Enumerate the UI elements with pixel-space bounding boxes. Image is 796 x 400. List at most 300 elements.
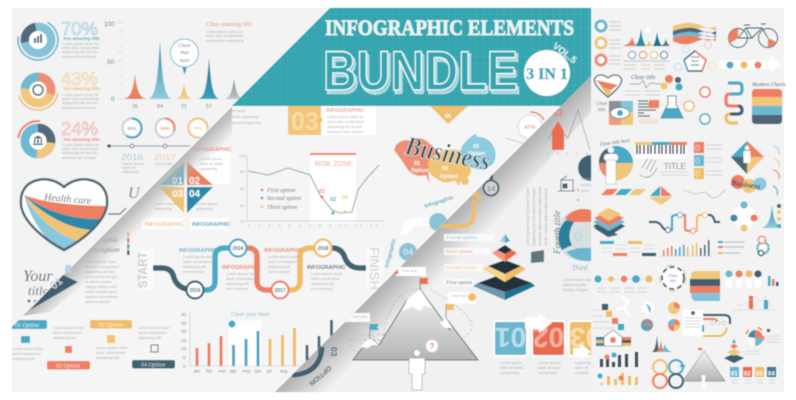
chart: risk zone line chart: Second option xyxy=(267,196,301,202)
chart: monthly bar chart: 25 xyxy=(181,321,187,326)
chart: monthly bar chart: jul xyxy=(266,368,272,374)
text block: clear title pulse xyxy=(625,75,668,95)
text block: 43 percent: eiusmod sed tempor xyxy=(62,106,97,110)
chart: person pie: Clear title here xyxy=(600,139,631,148)
panel: numbered blocks 01 02 03: Lorem ipsum xyxy=(538,361,560,365)
chart: wavy year timeline: adipiscing elit xyxy=(268,265,292,269)
chart: wavy year timeline: INFOGRAPHIC xyxy=(179,248,218,254)
chart: wavy year timeline: sed eiusmod xyxy=(311,287,333,291)
text block: 24 percent: adipiscing elit sed do xyxy=(62,151,97,155)
panel: numbered blocks 01 02 03: consectetur xyxy=(500,371,520,375)
row: mini numbered blocks: 04 xyxy=(768,372,775,378)
labels: diamond captions: adipiscing xyxy=(196,207,213,211)
chart: fourth and third title wheel xyxy=(553,209,608,292)
text block: graphic description: do eiusmod tempor xyxy=(85,275,118,279)
chart: wavy year timeline: 2016 xyxy=(232,246,244,252)
panel: four option tags: 04 Option xyxy=(141,362,165,368)
panel: four option tags: 02 Option xyxy=(56,364,80,370)
chart: wavy year timeline: 2018 xyxy=(317,246,329,252)
chart: wavy year timeline: Lorem ipsum dolor xyxy=(311,272,343,276)
text block: 70 percent: You amazing title xyxy=(63,36,100,41)
chart: mini numbered tags xyxy=(694,142,722,179)
panel: infographic 03 card: 03 xyxy=(291,108,319,136)
labels: diamond captions: INFOGRAPHIC xyxy=(192,222,231,228)
panel: infographic box 02: dolor sit amet xyxy=(200,162,224,166)
chart: wavy year timeline: adipiscing elit xyxy=(311,282,335,286)
illustration: mountain with flags and person xyxy=(344,278,478,390)
chart: layered pyramid: Third option xyxy=(445,249,473,255)
chart: four-loop flower xyxy=(653,360,683,388)
icon: white arrow with dots xyxy=(720,55,781,72)
chart: risk zone line chart: 80 xyxy=(240,169,245,174)
chart: horizontal timeline: Lorem ipsum xyxy=(122,162,144,166)
icon: numbered pin 14 xyxy=(466,172,498,200)
panel: four option tags: amet consectetur xyxy=(53,331,83,335)
chart: wavy year timeline: sed eiusmod xyxy=(183,270,205,274)
label: mountain tags: Your text xyxy=(402,269,418,273)
panel: four option tags: 01 Option xyxy=(15,323,39,329)
text block: 24 percent: You amazing title xyxy=(63,137,100,142)
text block: graphic description: sit amet consectetur xyxy=(85,265,120,269)
shadow: first fold xyxy=(22,106,232,316)
icon: partial circle right: ipsum xyxy=(581,183,591,187)
chart: mini spikes xyxy=(652,335,672,352)
chart: photo grid with ellipse: title xyxy=(598,108,607,113)
text block: clear amazing title: consectetur adipiscing xyxy=(206,39,244,43)
labels: diamond captions: adipiscing xyxy=(155,207,172,211)
label: vol 5: VOL.5 xyxy=(550,41,579,67)
chart: tall spike xyxy=(761,204,783,228)
row: mini list xyxy=(718,241,745,254)
panel: infographic 03 card: Lorem ipsum dolor sit xyxy=(327,115,364,119)
chart: small diamond xyxy=(650,186,672,205)
chart: mini wave timeline xyxy=(649,212,720,234)
text block: vertical lorem with bank icon xyxy=(526,186,548,263)
labels: diamond captions: INFOGRAPHIC xyxy=(145,222,184,228)
callout: clear that here bubble xyxy=(170,39,198,75)
chart: wavy year timeline: amet consectetur xyxy=(268,260,298,264)
icon: pentagon: TEXT xyxy=(691,59,699,63)
text block: graphic description: ut labore dolore xyxy=(85,280,111,284)
text block: 70 percent xyxy=(61,19,100,59)
chart: horizontal timeline: 2016 xyxy=(121,153,144,162)
chart: four-part diamond 01 02 03 04: 02 xyxy=(189,176,201,187)
chart: spheres xyxy=(641,302,680,331)
text block: white note xyxy=(683,310,703,336)
chart: 24 percent donut xyxy=(16,120,56,159)
panel: infographic 03 card xyxy=(288,105,376,136)
icon: partial circle right xyxy=(576,154,592,202)
chart: layered pyramid: Fourth option xyxy=(445,235,477,241)
text block: graphic description: minim veniam quis xyxy=(85,290,117,294)
panel: four option tags: Lorem ipsum dolor xyxy=(53,326,85,330)
chart: horizontal timeline xyxy=(107,144,190,174)
chart: mini numbered tags: 0 xyxy=(695,143,700,153)
text block: 43 percent: 43% xyxy=(61,69,98,89)
chart: four pills xyxy=(726,270,778,288)
text block: upper lorem: sit amet amet ing xyxy=(232,121,261,125)
chart: risk zone line chart: 100 xyxy=(239,153,246,158)
text block: upper lorem: dolor adipiscing xyxy=(232,115,258,119)
chart: monthly bar chart: Clear your here xyxy=(231,312,269,318)
text block: 43 percent: amet sine consectetur xyxy=(62,97,100,101)
illustration: business ink splash: Option xyxy=(468,151,486,157)
text block: cropped U: U xyxy=(128,185,141,202)
chart: yellow bars xyxy=(598,373,638,385)
chart: monthly bar chart: feb xyxy=(206,368,213,374)
chart: monthly bar chart xyxy=(181,312,340,374)
chart: spike area chart: 0 xyxy=(111,96,115,103)
text block: graphic description: description xyxy=(86,245,120,254)
illustration: mini business splash xyxy=(730,175,766,193)
label: mountain tags: Your text xyxy=(352,315,368,319)
chart: risk zone line chart: 60 xyxy=(240,186,245,191)
text block: clear amazing title xyxy=(206,22,253,43)
chart: monthly bar chart: apr xyxy=(230,368,237,374)
panel: infographic box 02: Lorem ipsum xyxy=(200,157,222,161)
icon: gears xyxy=(758,236,768,256)
chart: monthly bar chart: 0 xyxy=(183,364,186,369)
text block: graphic description: adipiscing elit sed xyxy=(85,270,115,274)
chart: horizontal bars xyxy=(638,100,659,124)
chart: photo grid with ellipse: Clear xyxy=(596,102,607,107)
chart: four-part diamond 01 02 03 04 xyxy=(159,162,213,213)
icon: partial circle right: dolor xyxy=(581,189,590,193)
chart: monthly bar chart: jun xyxy=(254,368,262,374)
panel: numbered blocks 01 02 03: consect xyxy=(575,371,589,375)
icon: pentagon: YOUR xyxy=(691,55,700,59)
chart: fourth and third title wheel: tempor magna xyxy=(563,288,588,292)
illustration: mini mountain xyxy=(680,348,725,389)
panel: four option tags: Lorem ipsum dolor xyxy=(96,346,128,350)
panel: four option tags: amet consectetur xyxy=(96,351,126,355)
icon: mini heart xyxy=(595,75,621,97)
chart: monthly bar chart: 10 xyxy=(181,346,187,351)
row: mini numbered blocks: 02 xyxy=(744,372,751,378)
panel: infographic box 02: adipiscing xyxy=(200,167,217,171)
panel: four option tags: adipiscing elit xyxy=(96,356,120,360)
text block: vertical lorem with bank icon: Lorem ipsum dolor sit amet consec xyxy=(526,187,530,246)
text block: clear amazing title: Clear amazing title xyxy=(206,22,253,28)
panel: four option tags: 03 Option xyxy=(99,322,123,328)
panel: banner xyxy=(232,8,591,106)
panel: infographic box 02 xyxy=(192,146,232,184)
chart: wavy year timeline: Lorem ipsum dolor xyxy=(183,255,215,259)
icon: 03 option arc: OPTION xyxy=(308,364,332,387)
text block: 70 percent: Lorem ipsum dolor sit xyxy=(62,42,99,46)
chart: fourth and third title wheel: adipiscing elit xyxy=(563,283,587,287)
chart: wavy year timeline: INFOGRAPHIC xyxy=(264,248,303,254)
chart: fourth and third title wheel: Third xyxy=(572,264,588,272)
icon: yellow diamond tip xyxy=(430,106,468,124)
chart: hex ring xyxy=(660,265,686,291)
chart: modern chartes stack: Modern Charts xyxy=(751,82,786,88)
text block: 24 percent: amet sine consectetur xyxy=(62,147,100,151)
text block: graphic description: magna aliqua enim xyxy=(85,285,117,289)
chart: mini wheel with title xyxy=(745,327,780,354)
chart: monthly bar chart: 15 xyxy=(181,338,187,343)
icon: dark ribbon 01: 01 xyxy=(48,275,65,292)
illustration: business ink splash: Option xyxy=(440,174,458,180)
icon: pentagon: HERE xyxy=(691,63,699,67)
chart: wavy year timeline: INFOGRAPHIC xyxy=(222,265,261,271)
text block: 43 percent: adipiscing elit sed do xyxy=(62,101,97,105)
text block: graphic description xyxy=(85,232,130,304)
badge: 3 in 1 xyxy=(524,50,570,96)
chart: wavy year timeline: Lorem ipsum dolor xyxy=(226,272,258,276)
chart: spike area chart: 50 xyxy=(107,59,115,66)
panel: four option tags: amet consectetur xyxy=(138,331,168,335)
chart: red arrow line chart xyxy=(528,109,591,156)
chart: wavy year timeline xyxy=(135,240,383,298)
illustration: mini wave banner xyxy=(673,23,716,44)
chart: wavy year timeline: adipiscing elit xyxy=(183,265,207,269)
chart: red arrow line chart: 1 2 3 4 5 6 7 8 xyxy=(518,151,589,156)
icon: yellow pipe curve xyxy=(436,200,474,226)
chart: monthly bar chart: 5 xyxy=(183,355,186,360)
chart: iso layer stack xyxy=(593,208,625,237)
icon: curved connector with 04 and 05 xyxy=(384,195,454,269)
chart: wavy year timeline: INFOGRAPHIC xyxy=(307,265,346,271)
text block: 24 percent: 24% xyxy=(61,119,98,139)
text block: graphic description: graphic xyxy=(95,235,119,244)
chart: horizontal timeline: 2017 xyxy=(154,153,177,162)
chart: person diamond xyxy=(731,141,764,174)
panel: four option tags: Lorem ipsum dolor xyxy=(12,347,44,351)
chart: 47 percent ring: 47% xyxy=(524,125,536,131)
chart: four-part diamond 01 02 03 04: 01 xyxy=(172,176,184,187)
text block: upper lorem: sit amet, xyxy=(232,109,246,113)
chart: monthly bar chart: mar xyxy=(218,368,226,374)
chart: fourth and third title wheel: Lorem ipsum dolor xyxy=(563,278,595,282)
chart: wavy year timeline: 2015 xyxy=(189,288,201,294)
panel: infographic 03 card: INFOGRAPHIC xyxy=(326,108,365,114)
chart: mini donuts xyxy=(596,21,621,65)
row: mini numbered blocks: 01 xyxy=(731,372,738,378)
panel: numbered blocks 01 02 03: 03 xyxy=(570,322,601,353)
chart: horizontal timeline: dolor sit xyxy=(122,166,136,170)
text block: upper lorem xyxy=(232,109,261,125)
illustration: climber stairs xyxy=(593,298,630,330)
chart: percent rings: 50% xyxy=(160,126,170,131)
text block: mini title: TITLE xyxy=(664,162,686,171)
illustration: business ink splash: Business xyxy=(402,130,493,176)
chart: 43 percent donut xyxy=(18,72,59,112)
text block: 70 percent: adipiscing elit sed do xyxy=(62,50,97,54)
chart: spike area chart: 84 xyxy=(157,104,163,110)
text block: vertical lorem with bank icon: minim veniam quis nostrud exercit xyxy=(544,188,548,246)
icon: house banner xyxy=(596,330,631,346)
icon: curved connector with 04 and 05: Infographic xyxy=(424,195,454,210)
chart: layered pyramid: First option xyxy=(445,280,472,286)
chart: dark bars xyxy=(600,352,638,367)
chart: percent rings: 70% xyxy=(193,126,203,131)
chart: monthly bar chart: aug xyxy=(280,368,288,374)
text block: mini title xyxy=(660,162,688,175)
icon: 03 option arc xyxy=(292,347,339,387)
panel: preview collage xyxy=(593,21,786,389)
text block: your title xyxy=(23,268,53,302)
text block: clear amazing title: Lorem ipsum dolor sit xyxy=(206,30,243,34)
text block: your title: title xyxy=(28,283,48,298)
panel: four option tags: amet consectetur xyxy=(12,352,42,356)
label: mountain tags: Your text xyxy=(452,294,468,298)
panel: infographic box 02: INFOGRAPHIC xyxy=(193,147,232,153)
chart: spike area chart: 100 xyxy=(104,21,115,28)
chart: mini numbered tags: 0 xyxy=(695,156,700,166)
chart: wavy year timeline: adipiscing elit xyxy=(226,282,250,286)
text block: graphic description: ullamco laboris xyxy=(85,300,110,304)
chart: monthly bar chart: 20 xyxy=(181,329,187,334)
heading: bundle shadow: BUNDLE xyxy=(325,42,520,105)
chart: percent rings: 60% xyxy=(127,126,137,131)
chart: dot timeline xyxy=(594,275,652,292)
chart: fourth and third title wheel: 0 xyxy=(574,228,582,245)
chart: four-part diamond 01 02 03 04: 04 xyxy=(189,189,201,200)
chart: person pie xyxy=(599,139,633,184)
chart: wavy year timeline: FINISH xyxy=(367,247,382,290)
chart: photo grid with ellipse xyxy=(596,101,633,125)
panel: right sheet xyxy=(270,70,608,395)
chart: risk zone line chart: 20 xyxy=(240,219,245,224)
text block: 43 percent: Lorem ipsum dolor sit xyxy=(62,93,99,97)
chart: risk zone line chart xyxy=(239,153,384,228)
panel: four option tags: Lorem ipsum dolor xyxy=(138,326,170,330)
chart: spike area chart xyxy=(104,21,244,110)
illustration: business ink splash: 01 xyxy=(414,161,420,167)
chart: risk zone line chart: Third option xyxy=(267,205,297,211)
label: mountain tags xyxy=(345,267,476,322)
icon: numbered pin 14: 14 xyxy=(487,184,496,193)
chart: spike area chart: 21 xyxy=(181,104,187,110)
panel: infographic 03 card: adipiscing elit sit sed xyxy=(327,125,362,129)
chart: risk zone line chart: 40 xyxy=(240,203,245,208)
panel: four option tags xyxy=(8,320,175,370)
text block: clear amazing title: amet sine consectetur xyxy=(206,34,244,38)
chart: four circle ring xyxy=(730,202,758,232)
panel: numbered blocks 01 02 03: Lorem ipsum xyxy=(500,361,522,365)
chart: layered pyramid xyxy=(444,234,535,300)
badge: 3 in 1: 3 IN 1 xyxy=(526,66,568,83)
chart: monthly bar chart: may xyxy=(242,368,251,374)
icon: pentagon xyxy=(674,42,716,71)
text block: 24 percent: Lorem ipsum dolor sit xyxy=(62,143,99,147)
icon: 03 option arc: 03 xyxy=(329,347,339,357)
chart: piano keys xyxy=(635,142,687,177)
chart: wavy year timeline: amet consectetur xyxy=(311,277,341,281)
row: mini numbered blocks: 03 xyxy=(756,372,763,378)
panel: four option tags: adipiscing elit xyxy=(12,357,36,361)
row: mini numbered blocks xyxy=(730,367,776,383)
fold edge: first xyxy=(12,106,232,326)
chart: three rings xyxy=(682,84,710,125)
text block: vertical lorem with bank icon: ut labore dolore magna aliqua enim xyxy=(538,186,542,246)
chart: percent rings xyxy=(122,118,208,138)
text block: 70 percent: eiusmod sed tempor xyxy=(62,55,97,59)
chart: risk zone line chart: 1 2 3 4 5 6 7 8 9 10 11 12 xyxy=(248,223,379,228)
illustration: business ink splash: Option xyxy=(411,168,429,174)
chart: spike area chart: 35 xyxy=(132,104,138,110)
text block: 43 percent: You amazing title xyxy=(63,86,100,91)
text block: graphic description: Lorem ipsum dolor xyxy=(85,260,117,264)
text block: clear title pulse: Clear title xyxy=(631,75,656,81)
chart: mini pyramid xyxy=(724,339,744,363)
chart: mini bars xyxy=(660,240,712,256)
panel: middle sheet xyxy=(11,105,560,376)
chart: wavy year timeline: Lorem ipsum dolor xyxy=(268,255,300,259)
chart: 47 percent ring xyxy=(505,112,545,144)
row: parallelograms xyxy=(601,189,646,195)
heading: bundle: BUNDLE xyxy=(323,39,518,102)
ribbon stack behind banner: Bus xyxy=(295,20,310,31)
chart: fourth and third title wheel: Fourth title xyxy=(553,210,563,255)
chart: hex ring: title xyxy=(670,278,676,283)
illustration: business ink splash: 03 xyxy=(473,144,479,150)
text block: your title: Your xyxy=(23,268,53,285)
panel: infographic 03 card: eiusmod dolor tempor xyxy=(327,130,364,134)
icon: yellow diamond tip: 05 xyxy=(445,114,451,120)
illustration: mini business splash: Business xyxy=(730,178,761,191)
chart: risk zone line chart: 01 xyxy=(319,189,325,195)
chart: horizontal timeline: Lorem ipsum xyxy=(155,162,177,166)
panel: four option tags: adipiscing elit xyxy=(138,336,162,340)
chart: layered pyramid: Second option xyxy=(445,265,477,271)
illustration: mountain with flags and person: ? xyxy=(430,342,435,351)
chart: mini snake xyxy=(726,83,742,123)
chart: wavy year timeline: amet consectetur xyxy=(183,260,213,264)
icon: bicycle xyxy=(728,24,778,48)
panel: left sheet xyxy=(11,8,332,328)
chart: risk zone line chart: 02 xyxy=(330,197,336,203)
chart: small line xyxy=(683,189,726,198)
callout: clear that here bubble: Clear xyxy=(178,43,192,49)
chart: arc stack xyxy=(773,146,779,195)
text block: 24 percent: eiusmod sed tempor xyxy=(62,156,97,160)
icon: partial circle right: Lorem xyxy=(581,177,592,181)
labels: diamond captions xyxy=(142,202,231,229)
panel: numbered blocks 01 02 03: 01 xyxy=(495,322,526,353)
labels: diamond captions: Lorem ipsum xyxy=(196,202,218,206)
chart: mini numbered tags: 0 xyxy=(695,169,700,179)
icon: curved connector with 04 and 05: 04 xyxy=(403,247,413,257)
icon: dark ribbon 01 xyxy=(30,265,78,310)
icon: health care heart xyxy=(21,179,126,252)
chart: monthly bar chart: 30 xyxy=(181,312,187,317)
labels: diamond captions: Lorem ipsum xyxy=(155,202,177,206)
chart: wavy year timeline: amet consectetur xyxy=(226,277,256,281)
icon: crane xyxy=(558,176,575,191)
ribbon stack behind banner xyxy=(260,20,310,78)
icon: flask and bubbles xyxy=(660,75,683,118)
chart: risk zone line chart: First option xyxy=(266,188,296,194)
chart: risk zone line chart: 03 xyxy=(342,195,348,201)
panel: numbered blocks 01 02 03: 02 xyxy=(533,322,564,353)
illustration: business ink splash: 02 xyxy=(442,166,448,172)
chart: risk zone line chart: RISK ZONE xyxy=(315,161,353,168)
callout: clear that here bubble: that xyxy=(180,50,189,56)
chart: pipe loop xyxy=(703,315,730,336)
chart: horizontal timeline: adipiscing xyxy=(122,170,139,174)
icon: health care heart: Health care xyxy=(43,192,92,207)
text block: 24 percent xyxy=(61,119,100,160)
panel: numbered blocks 01 02 03: Lorem ipsum xyxy=(575,361,597,365)
text block: 70 percent: 70% xyxy=(61,19,98,39)
chart: four-part diamond 01 02 03 04: 03 xyxy=(172,189,184,200)
panel: numbered blocks 01 02 03: dolor sit amet xyxy=(500,366,524,370)
chart: bars seen over fold xyxy=(306,334,334,360)
panel: infographic 03 card: amet sine consectetur xyxy=(327,120,365,124)
chart: modern chartes stack xyxy=(751,82,786,124)
